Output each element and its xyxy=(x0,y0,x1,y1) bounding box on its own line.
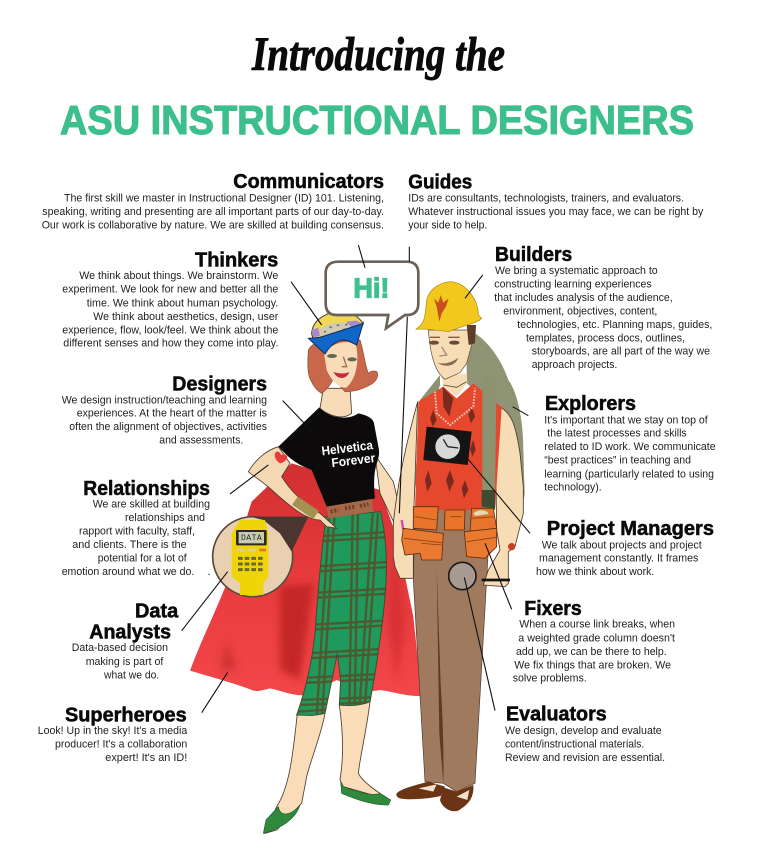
text: Builders xyxy=(494,243,712,371)
text: Evaluators: content/instructional materials. xyxy=(505,739,644,751)
text: Superheroes xyxy=(38,704,188,764)
leader lines xyxy=(182,245,530,713)
brown trousers xyxy=(413,507,488,792)
magnifier: calculator watch xyxy=(213,517,308,597)
text: Project Managers: management constantly. It frames xyxy=(539,553,699,565)
text: Data Analysts xyxy=(72,600,179,681)
text: Guides: IDs are consultants, technologists, trainers, and evaluators. xyxy=(408,193,684,205)
shirt text: Forever xyxy=(331,451,376,470)
text: Designers: Designers xyxy=(172,373,267,396)
text: Relationships: We are skilled at building xyxy=(93,498,210,510)
text: Builders: We bring a systematic approach to xyxy=(495,265,658,277)
hammer handle xyxy=(482,576,510,584)
text: Relationships: emotion around what we do. xyxy=(62,566,194,578)
text: Evaluators xyxy=(505,703,665,764)
text: Superheroes: producer! It's a collaboration xyxy=(55,739,187,751)
text: Explorers: technology). xyxy=(544,482,602,494)
red shirt xyxy=(415,375,502,510)
text: Data Analysts: Analysts xyxy=(89,620,171,643)
text: Evaluators: Review and revision are essential. xyxy=(505,752,665,764)
neck xyxy=(320,388,352,417)
left arm and hand xyxy=(393,402,418,578)
text: Data Analysts: Data xyxy=(135,600,179,623)
text: Explorers: Explorers xyxy=(545,392,636,415)
text: Builders: storyboards, are all part of the way we xyxy=(532,346,710,358)
text: Project Managers: how we think about work. xyxy=(536,566,654,578)
title: ASU Instructional Designers: ASU INSTRUCTIONAL DESIGNERS xyxy=(60,97,694,143)
speech bubble: Hi! xyxy=(353,273,389,304)
text: Relationships: potential for a lot of xyxy=(98,553,188,565)
text: Thinkers: We think about things. We brainstorm. We xyxy=(79,270,278,282)
text: Communicators: speaking, writing and presenting are all important parts of our day-to-day. xyxy=(42,206,384,218)
title: Introducing the: Introducing the xyxy=(251,28,505,81)
orange tool belt xyxy=(402,507,497,560)
text: Fixers: We fix things that are broken. We xyxy=(514,659,671,671)
necklace xyxy=(435,388,475,425)
text: Superheroes: Superheroes xyxy=(65,704,187,727)
text: Thinkers: time. We think about human psychology. xyxy=(87,297,278,309)
wrist watch xyxy=(508,543,515,550)
text: Fixers: When a course link breaks, when xyxy=(519,619,675,631)
cereal bowl hat xyxy=(308,310,363,354)
text: Explorers: learning (particularly related to using xyxy=(544,468,714,480)
illustration: two instructional designers xyxy=(182,245,530,833)
text: Fixers: add up, we can be there to help. xyxy=(516,646,667,658)
text: Project Managers: Project Managers xyxy=(547,517,714,540)
text: Communicators: Our work is collaborative by nature. We are skilled at building consensus. xyxy=(42,219,384,231)
text: Explorers: It's important that we stay on top of xyxy=(544,414,709,426)
brown shoes xyxy=(396,782,473,811)
text: Thinkers: Thinkers xyxy=(195,249,278,272)
yellow calculator watch: DATA xyxy=(241,534,262,543)
text: Project Managers xyxy=(536,517,714,578)
red superhero cape xyxy=(190,463,422,696)
text: Thinkers: We think about aesthetics, design, user xyxy=(93,311,279,323)
text: Fixers: Fixers xyxy=(524,597,582,620)
woman's right arm xyxy=(375,455,401,528)
text: Explorers: “best practices” in teaching and xyxy=(544,455,691,467)
text: Data Analysts: Data-based decision xyxy=(72,642,168,654)
text: Relationships: and clients. There is the xyxy=(72,539,187,551)
text: Superheroes: expert! It's an ID! xyxy=(105,752,187,764)
text: Relationships: Relationships xyxy=(83,477,210,500)
man xyxy=(393,282,523,811)
text: Builders: that includes analysis of the audience, xyxy=(494,292,673,304)
right arm and hand xyxy=(483,407,523,587)
text: Thinkers: experiment. We look for new and better all the xyxy=(62,284,278,296)
text: Explorers: related to ID work. We communicate xyxy=(544,441,716,453)
clock tablet xyxy=(423,427,472,465)
text: Explorers: the latest processes and skills xyxy=(547,428,687,440)
pink pen xyxy=(402,520,403,530)
text: Relationships: . xyxy=(208,566,211,578)
text: Explorers xyxy=(544,392,716,494)
text: Builders: technologies, etc. Planning maps, guides, xyxy=(517,319,712,331)
text: Communicators: The first skill we master in Instructional Designer (ID) 101. Listening, xyxy=(64,193,384,205)
woman's left arm with heart tattoo xyxy=(248,447,337,528)
text: Guides: Guides xyxy=(408,170,472,193)
text: Builders: approach projects. xyxy=(532,359,617,371)
backpack xyxy=(415,333,525,523)
text: Guides xyxy=(408,170,704,231)
legs xyxy=(265,702,390,833)
text: Guides: your side to help. xyxy=(408,219,487,231)
woman xyxy=(248,310,401,833)
text: Thinkers xyxy=(62,249,279,350)
text: Guides: Whatever instructional issues you may face, we can be right by xyxy=(408,206,704,218)
text: Relationships: rapport with faculty, staff, xyxy=(79,525,195,537)
speech bubble xyxy=(326,262,418,328)
neck and collar xyxy=(442,373,467,397)
text: Relationships xyxy=(62,477,211,578)
plaid capri pants xyxy=(297,512,386,715)
text: Communicators xyxy=(42,170,384,231)
text: Superheroes: Look! Up in the sky! It's a media xyxy=(38,725,188,737)
text: Data Analysts: what we do. xyxy=(103,669,159,681)
belt xyxy=(327,498,373,518)
shirt text: Helvetica xyxy=(321,438,375,458)
text: Fixers xyxy=(513,597,675,685)
hair xyxy=(308,340,378,393)
text: Builders: Builders xyxy=(495,243,572,266)
text: Fixers: a weighted grade column doesn't xyxy=(518,633,675,645)
text: Thinkers: different senses and how they come into play. xyxy=(63,338,278,350)
magnifier: gray lens xyxy=(449,562,476,590)
text: Builders: constructing learning experiences xyxy=(494,278,652,290)
text: Builders: templates, process docs, outlines, xyxy=(526,333,685,345)
text: Evaluators: Evaluators xyxy=(506,703,607,726)
black t-shirt xyxy=(278,407,379,507)
text: Builders: environment, objectives, content, xyxy=(503,305,657,317)
yellow hard hat with pitchfork xyxy=(416,282,482,332)
text: Designers: We design instruction/teaching and learning xyxy=(62,394,267,406)
text: Evaluators: We design, develop and evaluate xyxy=(505,725,662,737)
text: Fixers: solve problems. xyxy=(513,673,587,685)
face xyxy=(324,342,357,388)
green shoes xyxy=(263,782,391,833)
text: Thinkers: experience, flow, look/feel. We think about the xyxy=(62,324,278,336)
text: Designers xyxy=(62,373,267,447)
text: Designers: often the alignment of objectives, activities xyxy=(69,421,267,433)
text: Relationships: relationships and xyxy=(125,512,205,524)
head xyxy=(428,325,476,379)
text: Data Analysts: making is part of xyxy=(86,656,164,668)
text: Designers: and assessments. xyxy=(159,435,243,447)
text: Designers: experiences. At the heart of the matter is xyxy=(77,408,267,420)
shirt text xyxy=(321,438,376,471)
text: Project Managers: We talk about projects and project xyxy=(542,539,702,551)
text: Communicators: Communicators xyxy=(233,170,384,193)
